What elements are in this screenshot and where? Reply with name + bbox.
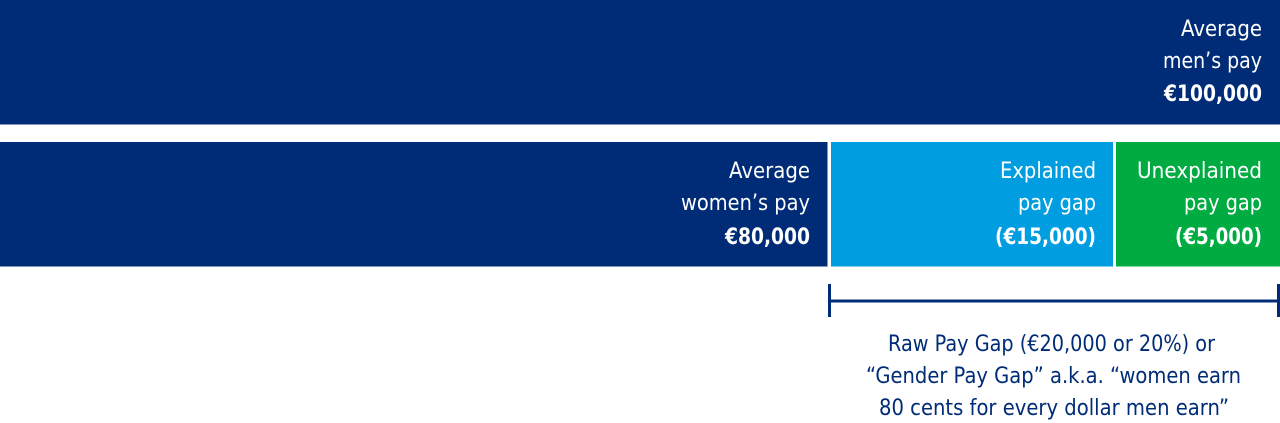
label: average men's pay: men’s pay xyxy=(1163,49,1262,74)
bar: explained pay gap xyxy=(831,142,1113,266)
label: average women's pay: €80,000 xyxy=(724,225,810,250)
bar: average men's pay xyxy=(0,0,1280,124)
label: explained pay gap: (€15,000) xyxy=(995,225,1096,250)
label: unexplained pay gap xyxy=(1137,159,1262,250)
caption: raw pay gap explanation: 80 cents for every dollar men earn” xyxy=(879,396,1229,421)
bar: average women's pay xyxy=(0,142,828,266)
label: explained pay gap: pay gap xyxy=(1018,191,1096,216)
caption: raw pay gap explanation xyxy=(866,332,1241,421)
label: average men's pay: Average xyxy=(1181,17,1262,42)
label: unexplained pay gap: (€5,000) xyxy=(1175,225,1262,250)
bar: unexplained pay gap xyxy=(1116,142,1280,266)
label: average men's pay xyxy=(1163,17,1262,107)
bracket: raw pay gap span xyxy=(828,284,1280,317)
label: explained pay gap xyxy=(995,159,1096,250)
label: explained pay gap: Explained xyxy=(1000,159,1096,184)
label: average women's pay: women’s pay xyxy=(681,191,810,216)
caption: raw pay gap explanation: “Gender Pay Gap” a.k.a. “women earn xyxy=(866,364,1241,389)
label: unexplained pay gap: pay gap xyxy=(1184,191,1262,216)
label: unexplained pay gap: Unexplained xyxy=(1137,159,1262,184)
label: average men's pay: €100,000 xyxy=(1163,82,1262,107)
label: average women's pay xyxy=(681,159,810,250)
caption: raw pay gap explanation: Raw Pay Gap (€20,000 or 20%) or xyxy=(888,332,1216,357)
label: average women's pay: Average xyxy=(729,159,810,184)
